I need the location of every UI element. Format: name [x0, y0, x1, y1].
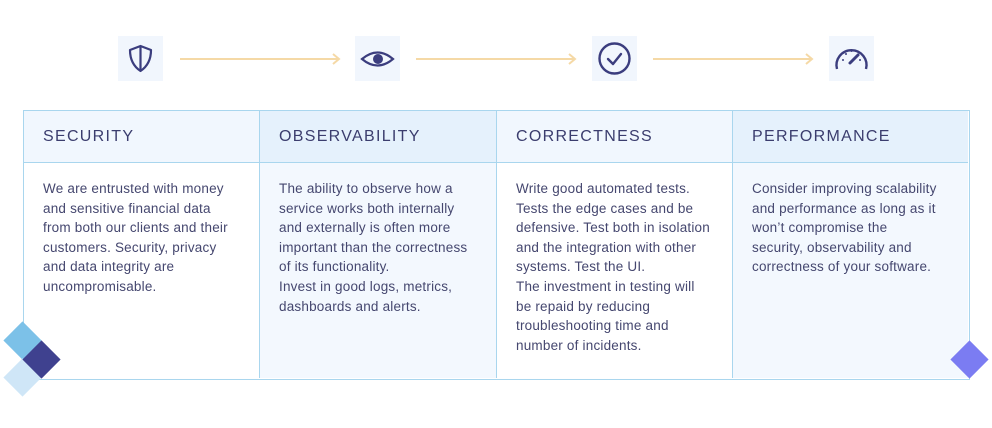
panel: correctness: systems. Test the UI. [516, 259, 645, 274]
icon: shield [118, 36, 163, 81]
panel: correctness [496, 111, 733, 378]
panel: security: SECURITY [43, 128, 134, 145]
panel: security: and sensitive financial data [43, 201, 211, 216]
panel: observability: service works both internally [279, 201, 454, 216]
panel: security: We are entrusted with money [43, 181, 224, 196]
panel: correctness: Write good automated tests. [516, 181, 690, 196]
panel: security: from both our clients and their [43, 220, 228, 235]
panel: performance: correctness of your software. [752, 259, 931, 274]
icon: eye [355, 36, 400, 81]
panel: observability: and externally is often more [279, 220, 450, 235]
panel: observability: The ability to observe how a [279, 181, 453, 196]
panel: observability: of its functionality. [279, 259, 390, 274]
panel: security [24, 111, 260, 378]
panel: correctness: defensive. Test both in isolation [516, 220, 710, 235]
panel: performance: Consider improving scalability [752, 181, 937, 196]
panel: correctness: The investment in testing will [516, 279, 695, 294]
panel: correctness: troubleshooting time and [516, 318, 669, 333]
decoration: right diamond [950, 340, 989, 379]
panel: observability: dashboards and alerts. [279, 299, 421, 314]
panel: correctness: CORRECTNESS [516, 128, 653, 145]
panel: security: and data integrity are [43, 259, 174, 274]
panel: observability: important than the correctness [279, 240, 467, 255]
arrow 1 [180, 53, 340, 65]
panel: security: customers. Security, privacy [43, 240, 216, 255]
panel: correctness: and the integration with other [516, 240, 696, 255]
table [23, 110, 970, 380]
panel: correctness: number of incidents. [516, 338, 642, 353]
panel: observability: OBSERVABILITY [279, 128, 421, 145]
panel: security: uncompromisable. [43, 279, 157, 294]
panel: performance: security, observability and [752, 240, 912, 255]
panel: performance [732, 111, 968, 378]
panel: performance: won’t compromise the [752, 220, 887, 235]
icon: check [592, 36, 637, 81]
panel: correctness: Tests the edge cases and be [516, 201, 693, 216]
panel: correctness: be repaid by reducing [516, 299, 650, 314]
panel: performance: PERFORMANCE [752, 128, 891, 145]
panel: performance: and performance as long as it [752, 201, 936, 216]
panel: observability [259, 111, 496, 378]
decoration: left diamonds [4, 322, 60, 396]
icon: gauge [829, 36, 874, 81]
panel: observability: Invest in good logs, metrics, [279, 279, 452, 294]
arrow 3 [653, 53, 814, 65]
arrow 2 [416, 53, 576, 65]
